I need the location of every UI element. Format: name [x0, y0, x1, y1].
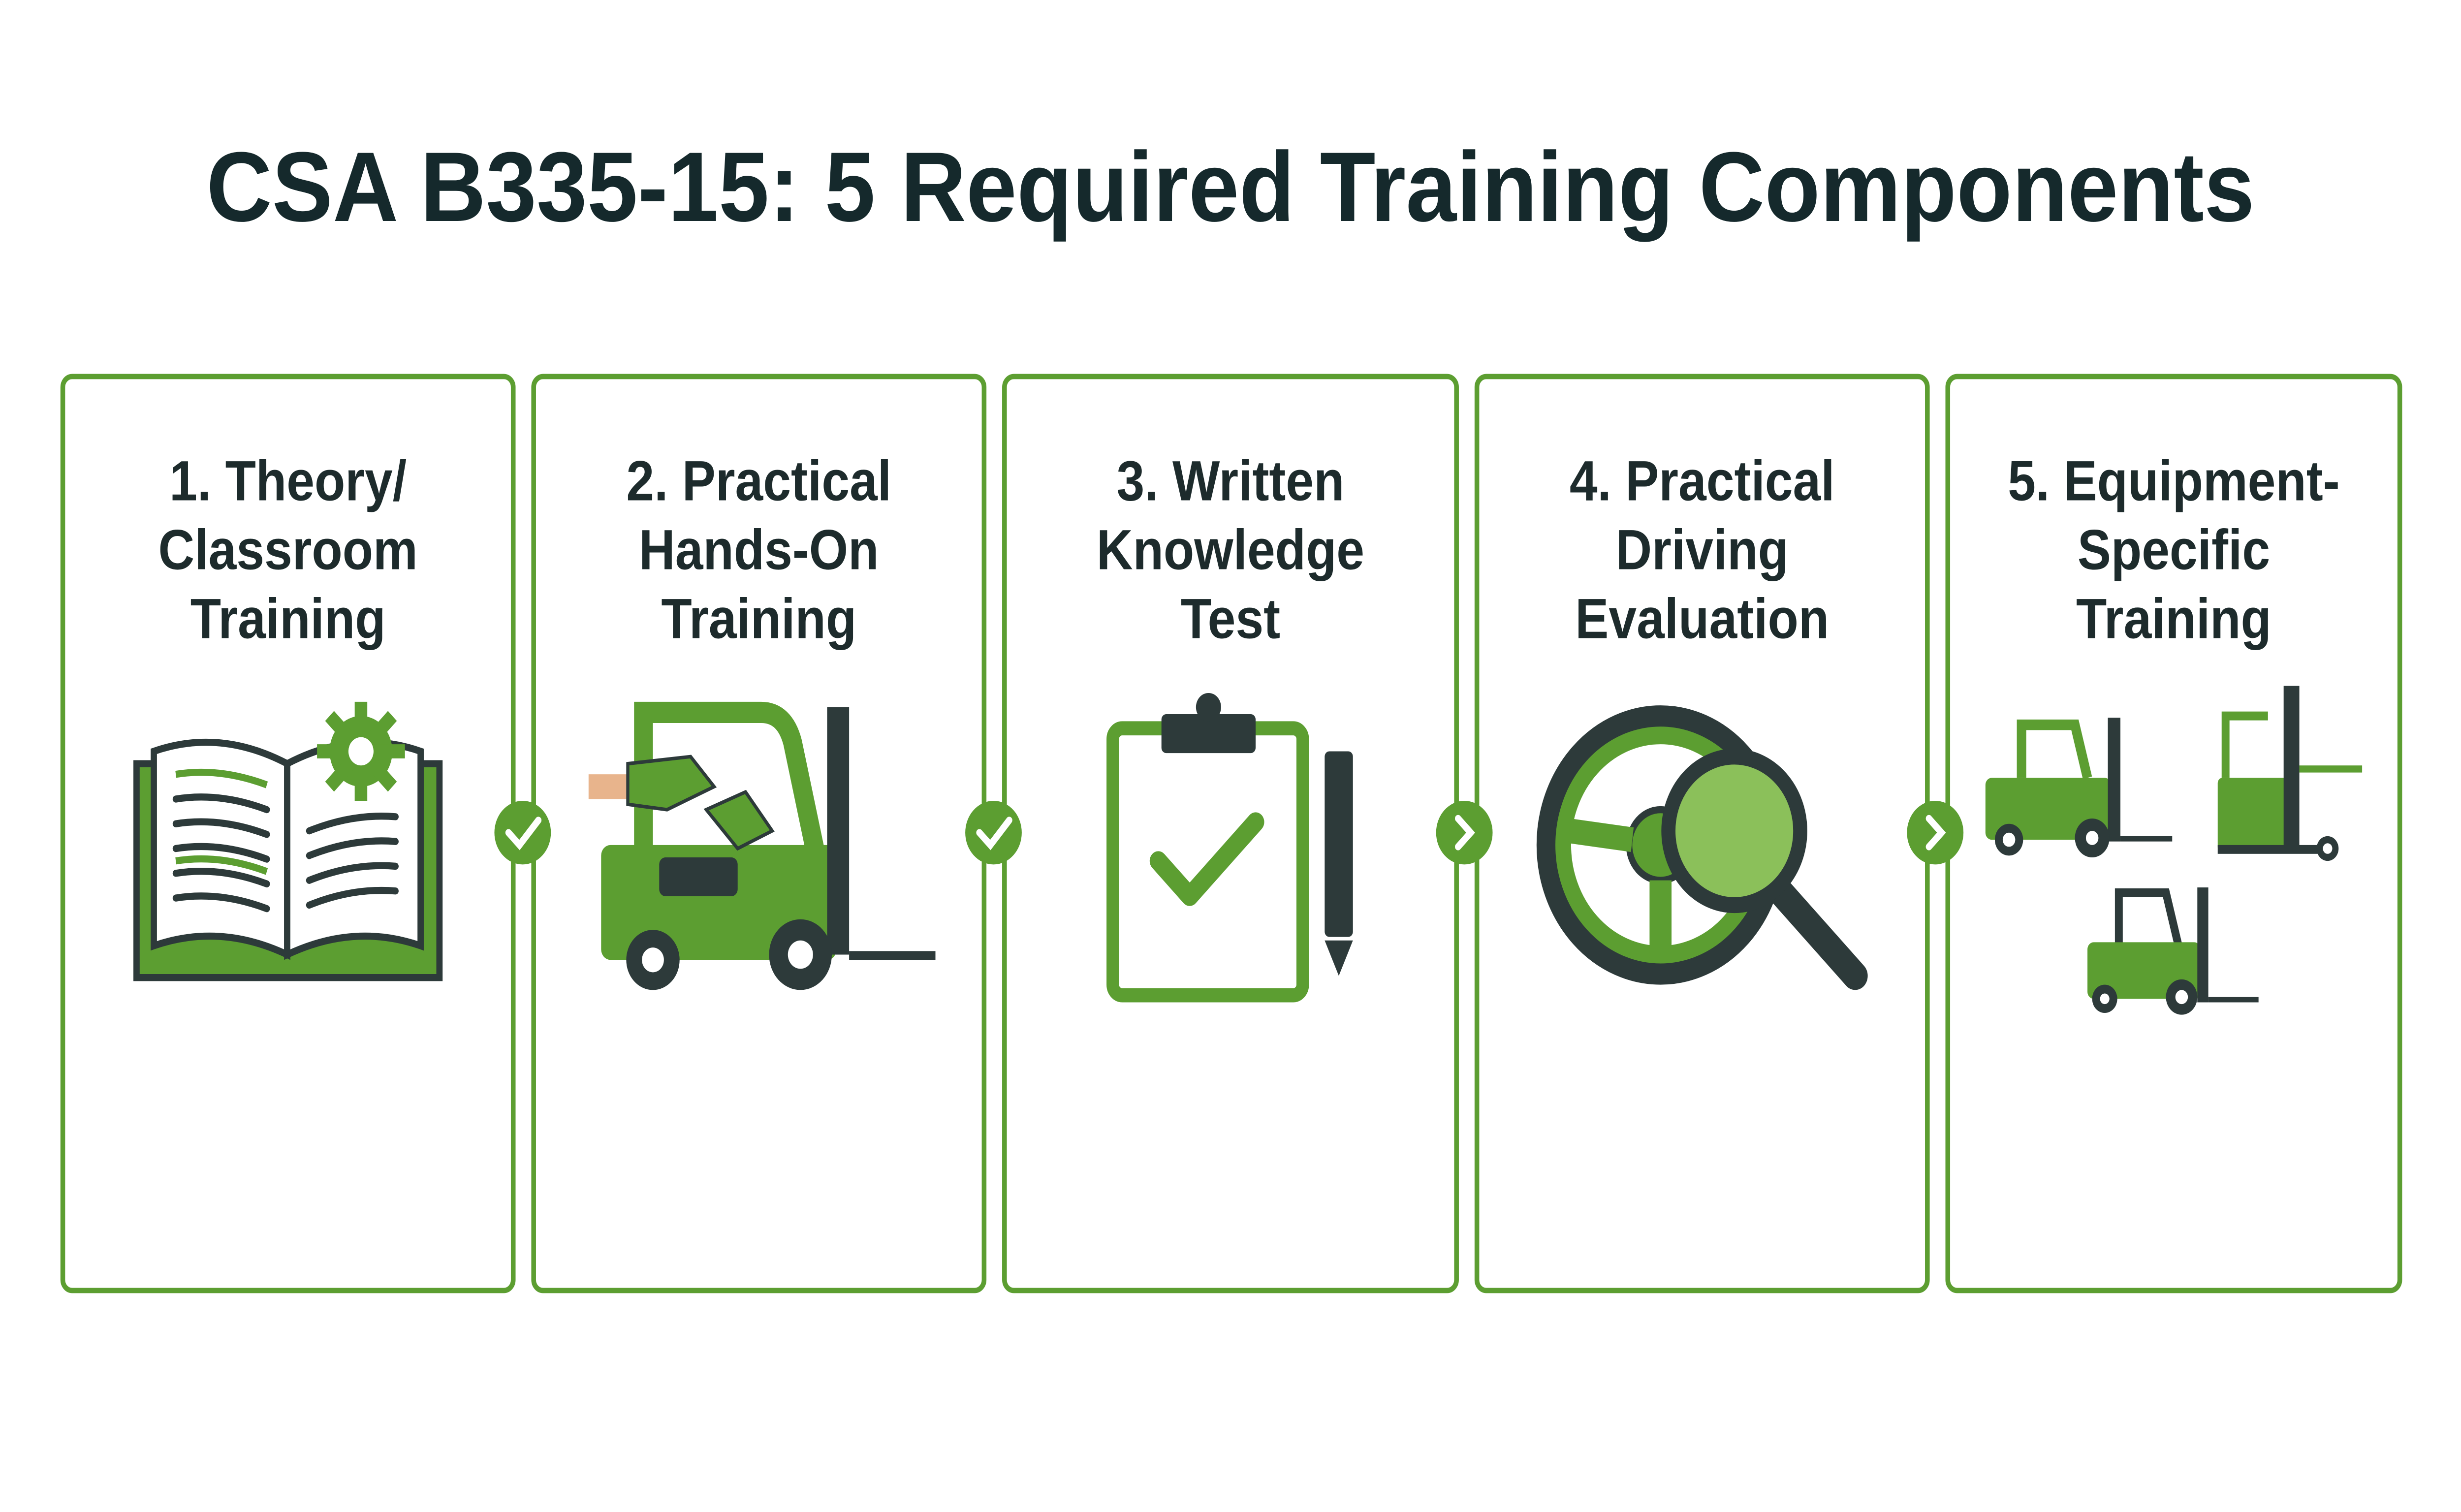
heading: theory: 1. Theory/ [169, 450, 407, 513]
connector: check 1 [494, 801, 551, 864]
heading: equipment-specific: Training [2076, 588, 2272, 651]
heading: theory: Training [190, 588, 386, 651]
connector: check 2 [965, 801, 1022, 864]
heading: theory: Classroom [158, 519, 418, 582]
heading: hands-on: 2. Practical [626, 450, 891, 513]
panel: 4 practical driving evaluation [1477, 377, 1927, 1291]
heading: written test: Knowledge [1097, 519, 1364, 582]
icon: steering wheel and magnifier [1547, 718, 1855, 976]
heading: written test: Test [1181, 588, 1280, 651]
heading: equipment-specific: Specific [2078, 519, 2270, 582]
title: CSA B335-15: 5 Required Training Components [206, 132, 2255, 242]
heading: written test: 3. Written [1117, 450, 1344, 513]
icon: open book with gear [136, 702, 440, 977]
heading: theory [158, 450, 418, 651]
heading: equipment-specific [2008, 450, 2340, 651]
heading: driving evaluation: 4. Practical [1570, 450, 1835, 513]
icon: clipboard and pencil [1113, 693, 1353, 995]
heading: hands-on [626, 450, 891, 651]
heading: equipment-specific: 5. Equipment- [2008, 450, 2340, 513]
heading: hands-on: Training [661, 588, 856, 651]
heading: driving evaluation [1570, 450, 1835, 651]
heading: driving evaluation: Evaluation [1575, 588, 1829, 651]
heading: driving evaluation: Driving [1616, 519, 1789, 582]
icon: three forklifts [1986, 686, 2362, 1015]
icon: forklift with gloves [589, 707, 936, 990]
panel: 5 equipment-specific training [1948, 377, 2400, 1291]
connector: arrow 4 [1907, 801, 1963, 864]
connector: arrow 3 [1436, 801, 1493, 864]
panel: 1 theory classroom training [63, 377, 513, 1291]
heading: hands-on: Hands-On [639, 519, 879, 582]
panel: 3 written knowledge test [1005, 377, 1456, 1291]
heading: written test [1097, 450, 1364, 651]
panel: 2 practical hands-on training [534, 377, 984, 1291]
